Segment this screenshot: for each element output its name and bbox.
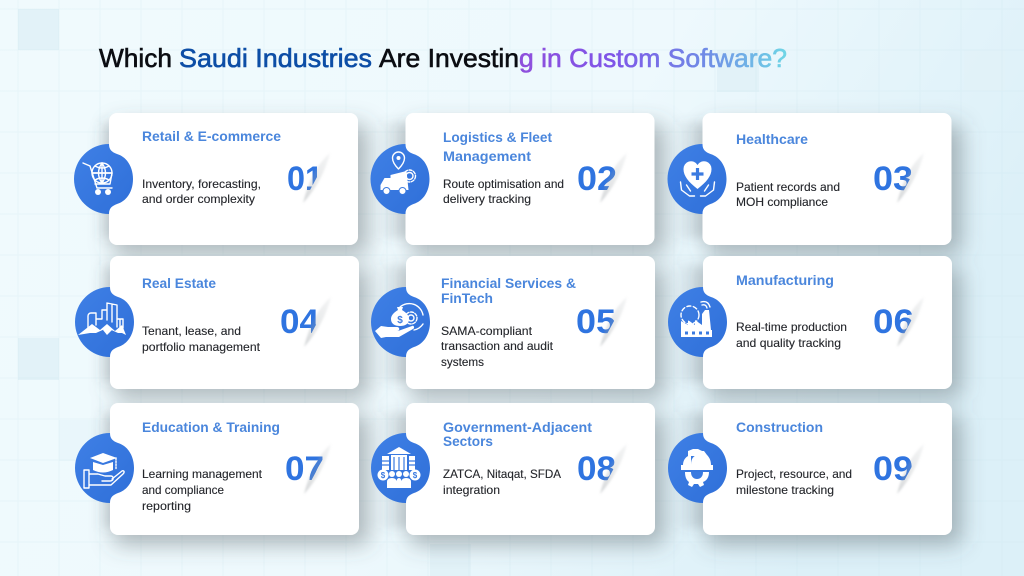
description: milestone tracking: [736, 483, 834, 497]
description: reporting: [142, 499, 191, 513]
panel: Manufacturing: [668, 256, 952, 389]
heading: Financial Services &: [441, 276, 576, 291]
number 03: [873, 153, 943, 203]
number 02: [577, 153, 646, 203]
icon: heart with cross held by hands: [668, 144, 726, 214]
panel: Financial Services & FinTech: [371, 256, 655, 389]
number 06: 06: [873, 303, 914, 341]
icon: truck, map pin and gear: [370, 144, 430, 214]
icon: government building, coins and people: $: [381, 471, 386, 480]
description: and compliance: [142, 483, 224, 497]
heading: Construction: [736, 420, 823, 435]
panel: Real Estate: [75, 256, 359, 389]
heading: Management: [443, 149, 532, 164]
heading: Government-Adjacent: [443, 420, 593, 435]
number 04: 04: [280, 303, 319, 341]
title: Are Investin: [379, 43, 519, 73]
heading: FinTech: [441, 291, 493, 306]
number 08: [577, 444, 646, 494]
description: integration: [443, 483, 500, 497]
number 05: 05: [576, 303, 616, 341]
heading: Healthcare: [736, 132, 809, 147]
icon: money bag, gear and hand: $: [397, 315, 403, 326]
description: delivery tracking: [443, 192, 531, 206]
number 07: 07: [285, 450, 324, 488]
heading: Manufacturing: [736, 273, 834, 288]
title: [99, 43, 787, 73]
icon: government building, coins and people: $: [413, 471, 418, 480]
panel: Education & Training: [75, 403, 359, 535]
title: g in Custom Software?: [519, 43, 787, 73]
icon: graduation cap and open hand: [75, 433, 134, 503]
icon: buildings and rooftops: [75, 287, 134, 357]
number 04: [280, 297, 350, 347]
heading: Retail & E-commerce: [142, 129, 281, 144]
panel: Retail & E-commerce: [74, 113, 358, 245]
description: Inventory, forecasting,: [142, 177, 261, 191]
icon: money bag, gear and hand: [371, 287, 430, 357]
description: Route optimisation and: [443, 177, 564, 191]
description: SAMA-compliant: [441, 324, 533, 338]
panel: Construction: [668, 403, 952, 535]
description: Learning management: [142, 467, 263, 481]
icon: factory with gear: [668, 287, 727, 357]
heading: Education & Training: [142, 420, 280, 435]
icon: government building, coins and people: [371, 433, 430, 503]
number 09: 09: [873, 450, 913, 488]
icon: hard hat and gear: [668, 433, 727, 503]
number 07: [285, 444, 350, 494]
number 02: 02: [577, 160, 617, 198]
number 06: [873, 297, 943, 347]
heading: Real Estate: [142, 276, 216, 291]
description: Project, resource, and: [736, 467, 852, 481]
number 01: 01: [287, 160, 323, 198]
heading: Logistics & Fleet: [443, 130, 552, 145]
description: and order complexity: [142, 192, 255, 206]
description: Patient records and: [736, 180, 840, 194]
description: Tenant, lease, and: [142, 324, 241, 338]
number 09: [873, 444, 943, 494]
description: MOH compliance: [736, 195, 828, 209]
title: Saudi Industries: [179, 43, 372, 73]
number 08: 08: [577, 450, 616, 488]
number 05: [576, 297, 646, 347]
description: Real-time production: [736, 320, 847, 334]
panel: Government-Adjacent Sectors: [371, 403, 655, 535]
number 03: 03: [873, 160, 913, 198]
description: systems: [441, 355, 484, 369]
description: transaction and audit: [441, 339, 554, 353]
description: and quality tracking: [736, 336, 841, 350]
heading: Sectors: [443, 434, 493, 449]
description: ZATCA, Nitaqat, SFDA: [443, 467, 561, 481]
description: portfolio management: [142, 340, 261, 354]
number 01: [287, 153, 349, 203]
title: Which: [99, 43, 172, 73]
icon: shopping cart with globe: [74, 144, 133, 214]
panel: Healthcare: [668, 113, 952, 245]
panel: Logistics & Fleet Management: [370, 113, 654, 245]
